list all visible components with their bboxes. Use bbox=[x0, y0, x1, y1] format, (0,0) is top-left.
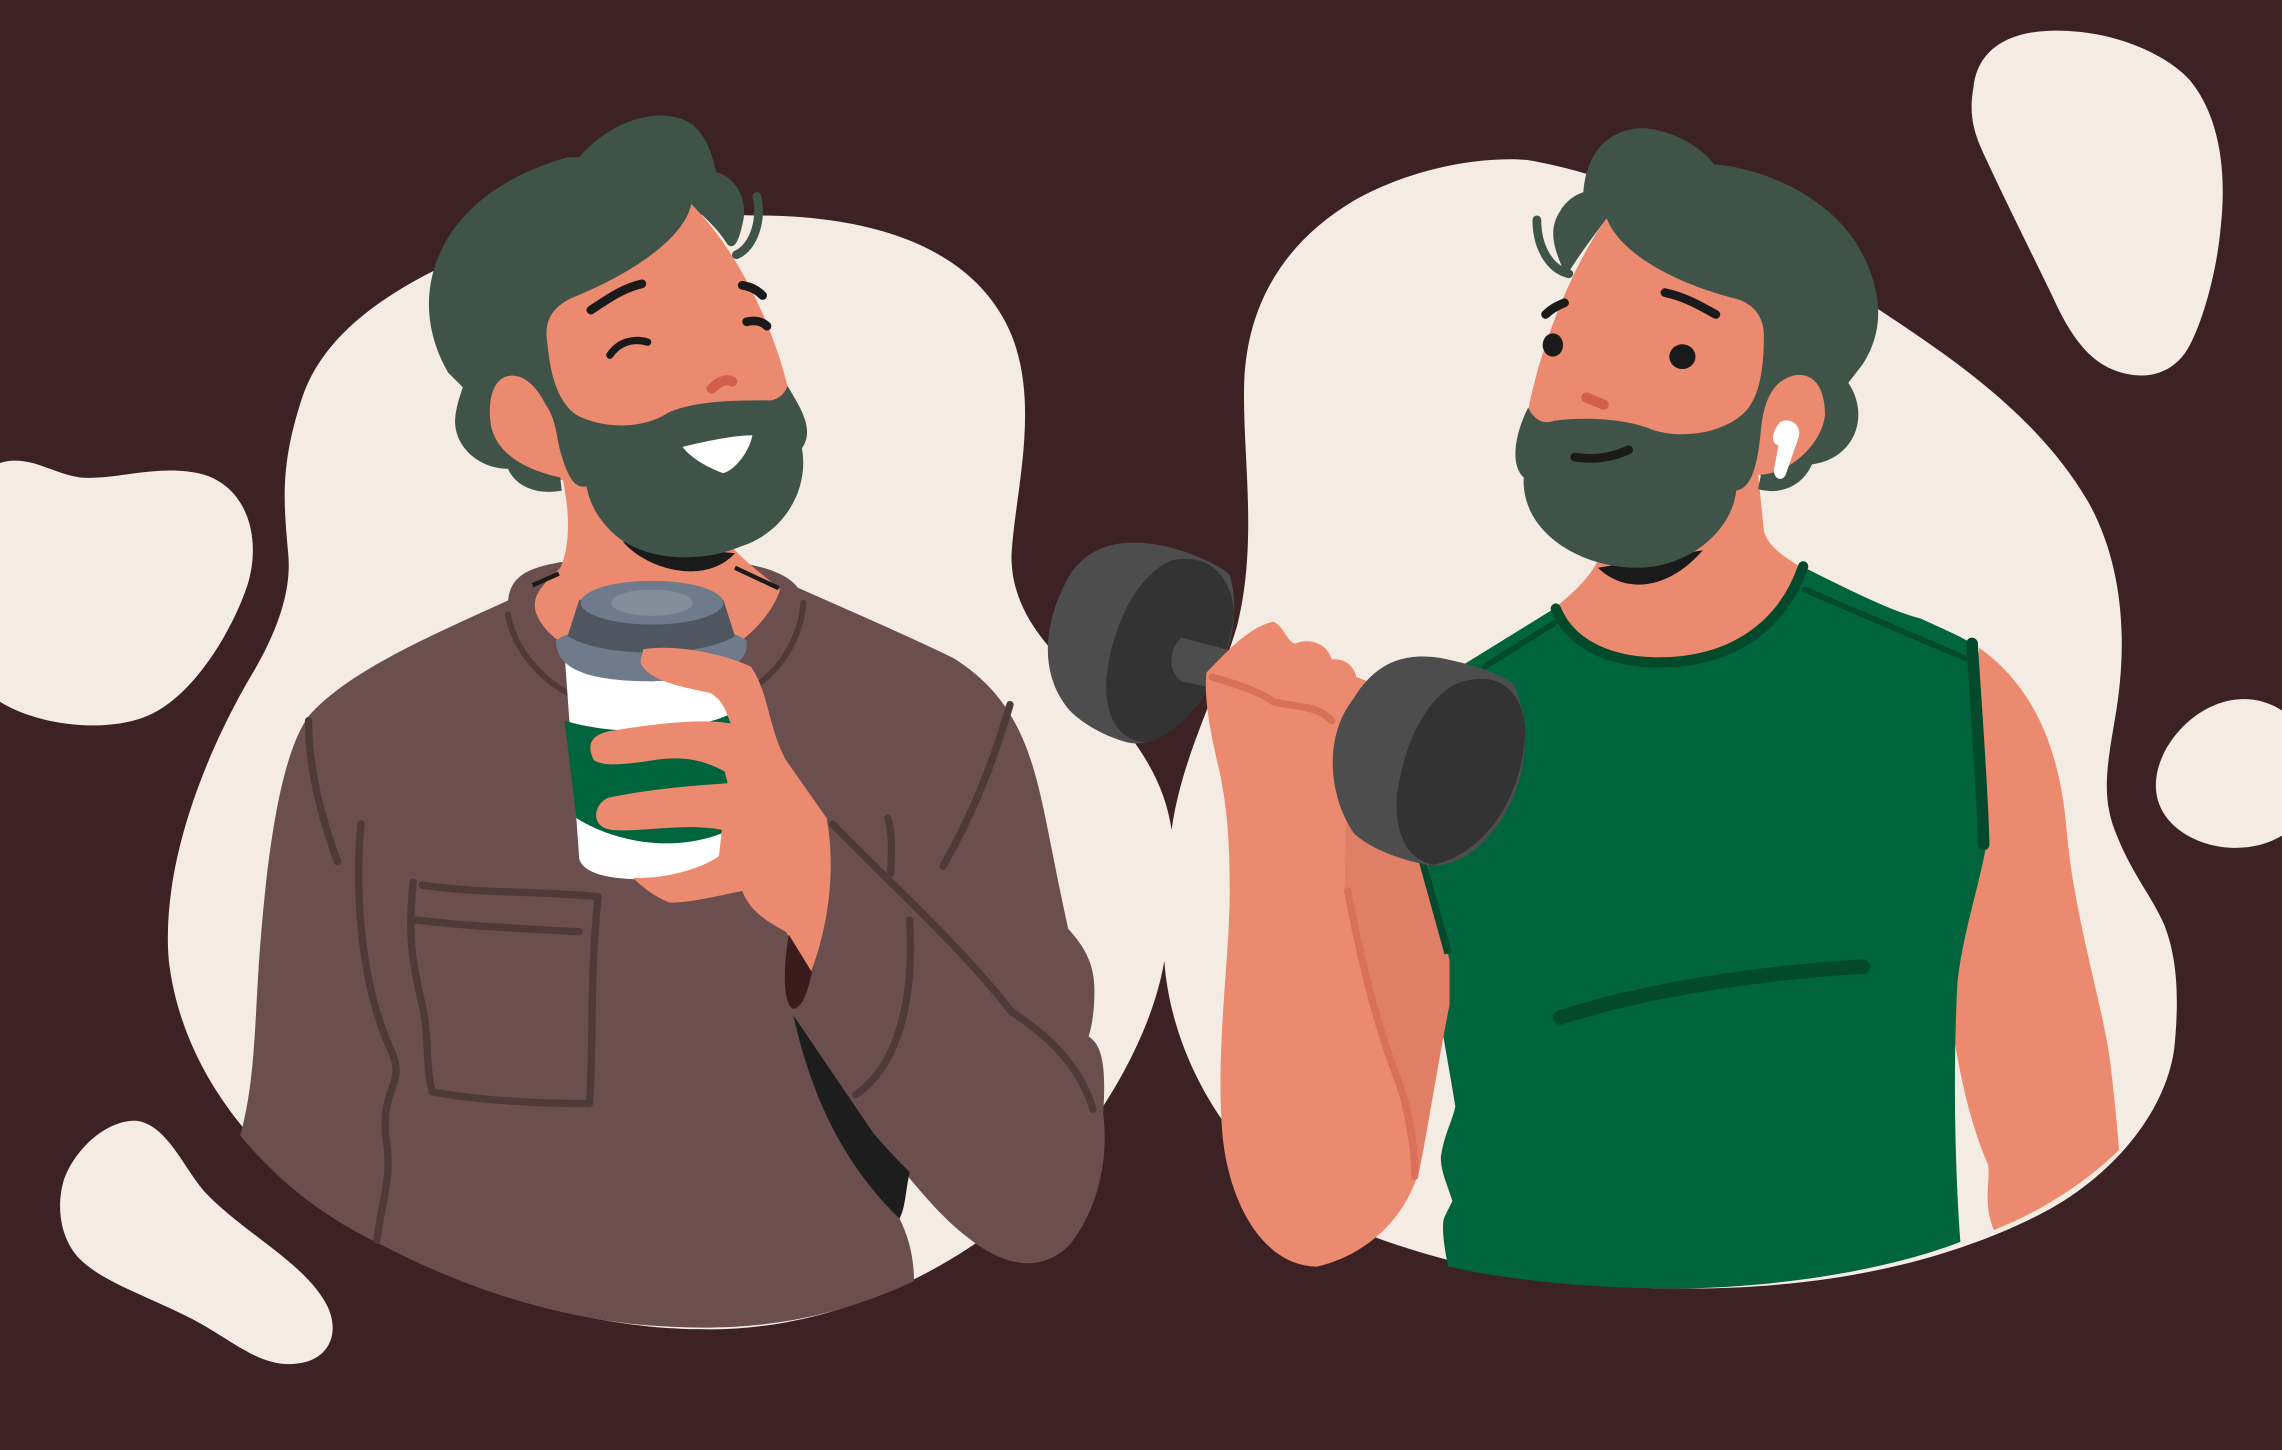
dumbbell back weight bbox=[1048, 543, 1252, 743]
head bbox=[1528, 218, 1781, 488]
hair and beard bbox=[1515, 128, 1878, 568]
dumbbell front weight bbox=[1333, 657, 1525, 865]
figure: coffee drinker bbox=[240, 115, 1105, 1328]
sweater body bbox=[240, 575, 1105, 1328]
far arm skin bbox=[1955, 648, 2119, 1230]
head bbox=[534, 204, 791, 488]
figure: weight lifter bbox=[1048, 128, 2119, 1288]
hair and beard bbox=[429, 115, 807, 557]
inner sleeve dark bbox=[793, 1015, 910, 1219]
coffee cup lid and body bbox=[556, 581, 747, 879]
smile teeth bbox=[683, 435, 752, 473]
green tank top bbox=[1397, 568, 1985, 1288]
forearm shadow bbox=[1345, 823, 1450, 1179]
face features bbox=[1546, 293, 1716, 458]
face features bbox=[591, 284, 767, 355]
collar bbox=[508, 562, 803, 693]
ear bbox=[1753, 370, 1829, 478]
collar and shirt seams bbox=[1484, 566, 1984, 1018]
hand holding cup bbox=[590, 648, 831, 972]
earbud bbox=[1773, 420, 1799, 479]
cuff shadow bbox=[785, 935, 812, 1009]
lifting arm bbox=[1206, 622, 1450, 1267]
neck skin bbox=[535, 469, 780, 670]
ear bbox=[486, 370, 571, 480]
neck skin bbox=[1554, 473, 1802, 662]
sweater seams bbox=[309, 705, 1093, 1240]
